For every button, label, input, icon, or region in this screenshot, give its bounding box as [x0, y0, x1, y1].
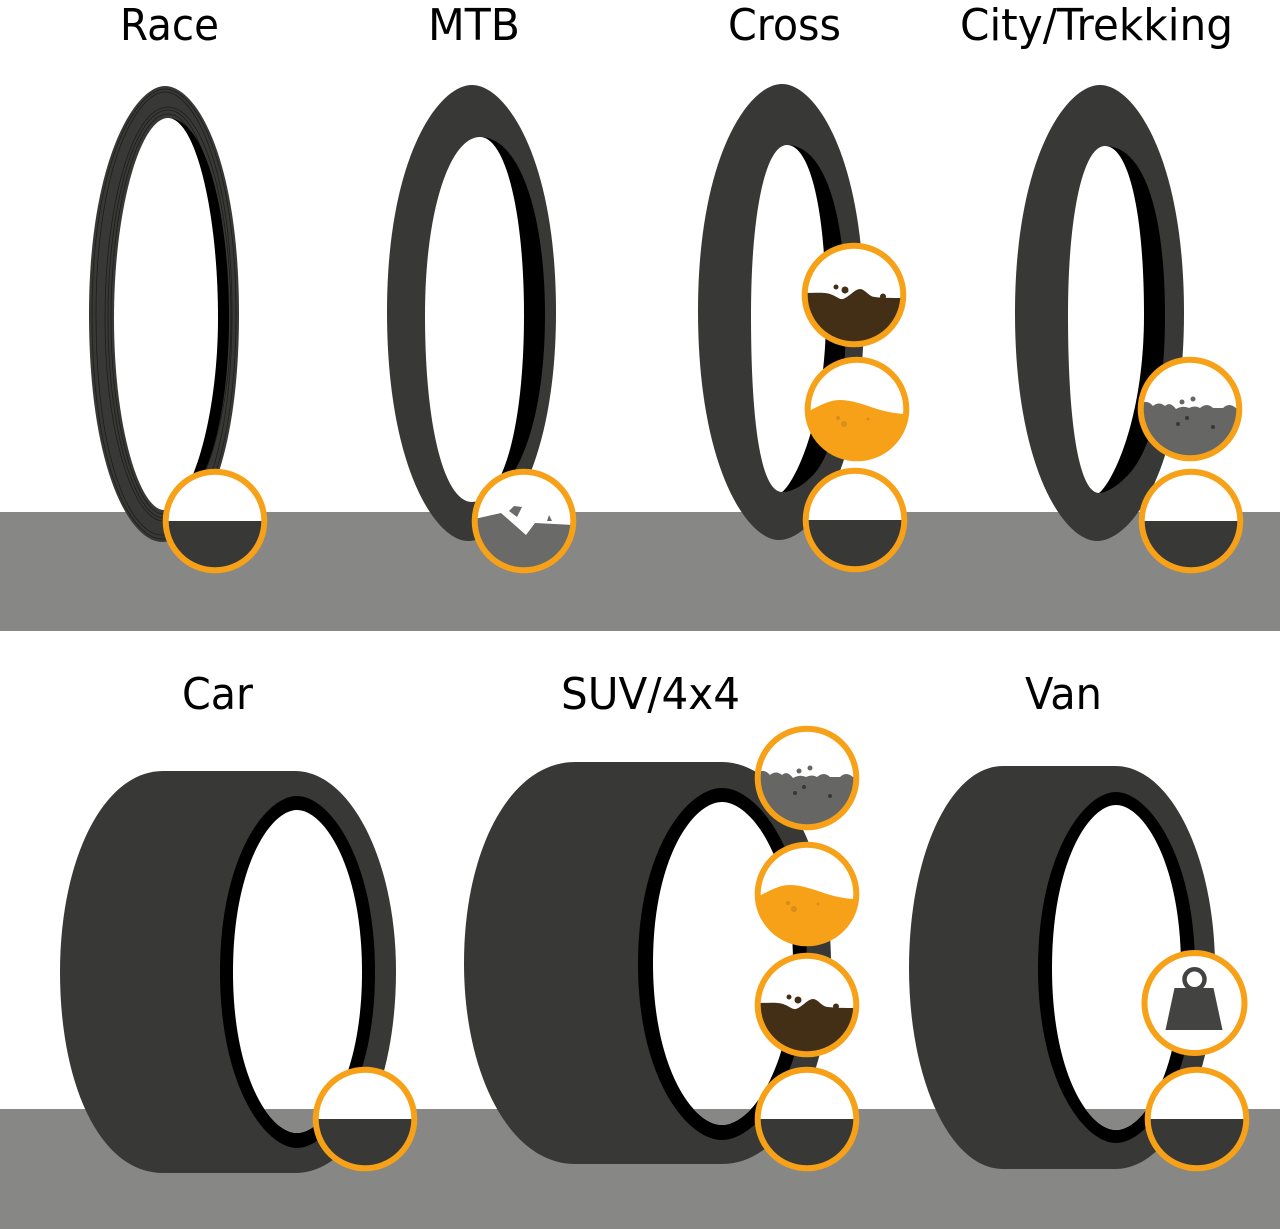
- badge: Car, smooth road: [315, 1070, 415, 1169]
- ground band: bicycle tyres: [0, 512, 1280, 631]
- badge: SUV/4x4, smooth road: [757, 1070, 857, 1169]
- heading: Cross: Cross: [728, 0, 841, 51]
- tyre: Car: [60, 771, 396, 1173]
- heading: City/Trekking: City/Trekking: [960, 0, 1233, 51]
- badge: City/Trekking, gravel: [1140, 360, 1240, 459]
- badge: Cross, sand: [807, 360, 907, 459]
- tyre: Race: [89, 86, 239, 542]
- badge: Van, heavy load weight: [1144, 953, 1244, 1053]
- heading: SUV/4x4: SUV/4x4: [561, 669, 740, 720]
- badge: Cross, mud: [804, 246, 904, 345]
- badge: City/Trekking, smooth road: [1141, 472, 1241, 571]
- tyre: City/Trekking: [1015, 85, 1184, 541]
- heading: Car: Car: [182, 669, 254, 720]
- tyre: SUV/4x4: [464, 762, 831, 1164]
- heading: Race: Race: [120, 0, 219, 51]
- badge: Cross, smooth road: [805, 471, 905, 570]
- badge: Race, smooth road: [165, 472, 265, 571]
- tyre: Cross: [698, 84, 864, 540]
- badge: SUV/4x4, gravel: [757, 729, 857, 828]
- heading: Van: Van: [1025, 669, 1102, 720]
- badge: Van, smooth road: [1147, 1070, 1247, 1169]
- tyre: MTB: [387, 85, 556, 541]
- ground band: motor vehicle tyres: [0, 1109, 1280, 1229]
- badge: SUV/4x4, sand: [757, 845, 857, 944]
- tyre: Van: [909, 766, 1215, 1169]
- heading: MTB: MTB: [428, 0, 520, 51]
- badge: SUV/4x4, mud: [757, 956, 857, 1055]
- badge: MTB, rocky terrain: [474, 472, 574, 571]
